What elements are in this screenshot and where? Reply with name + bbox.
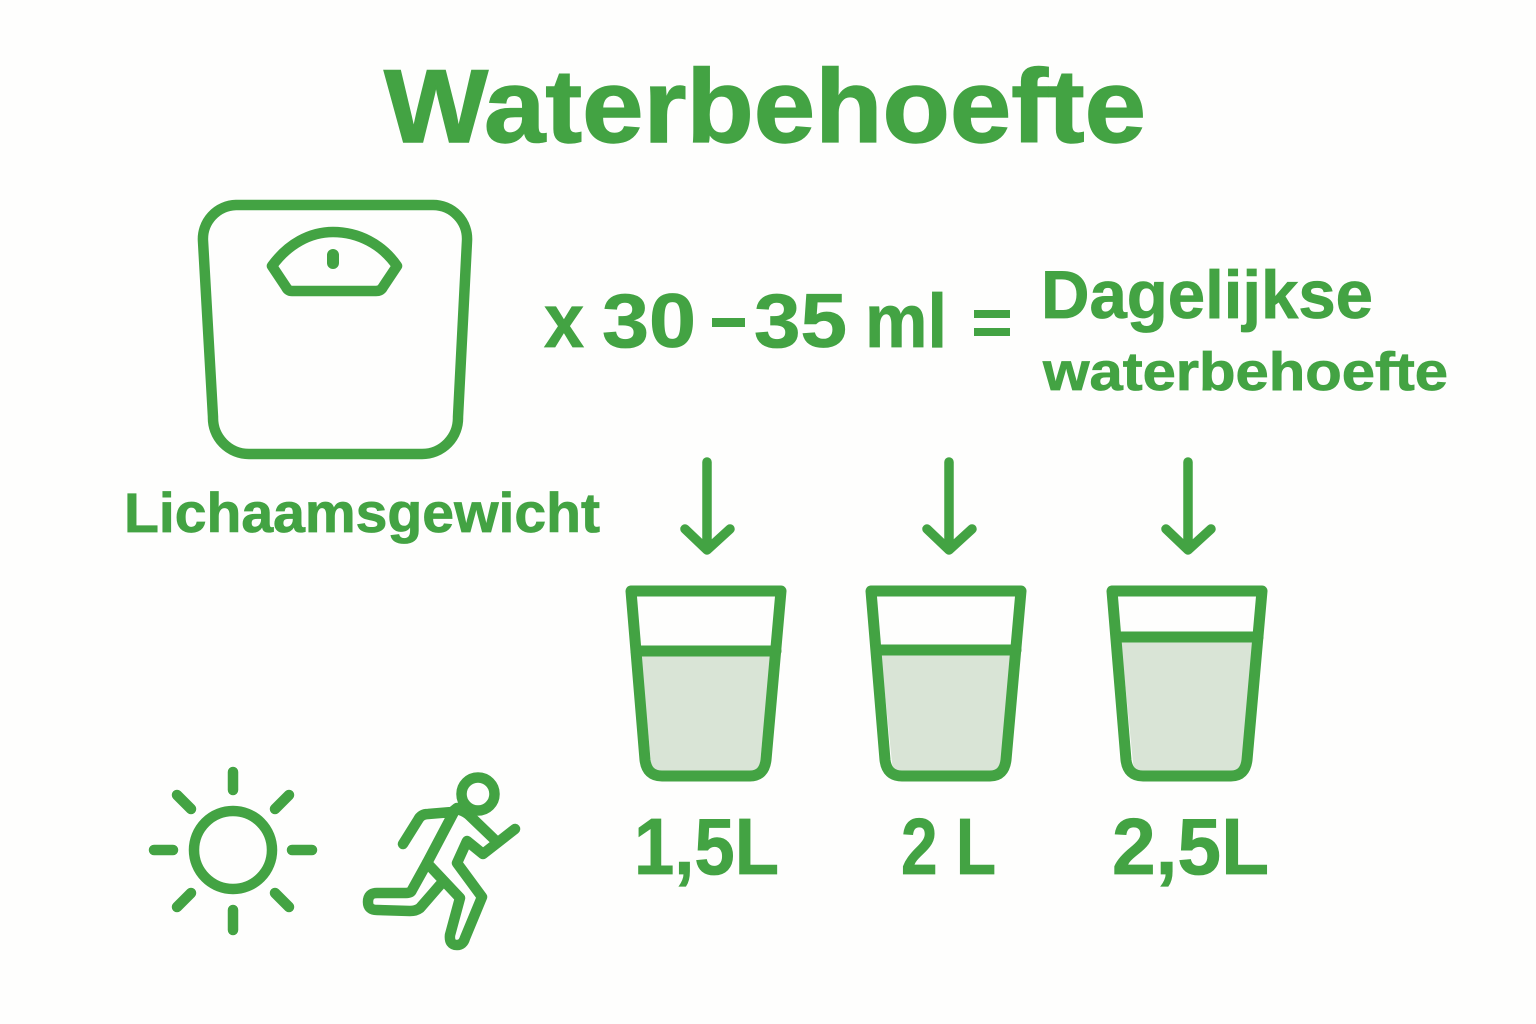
result: daily water need: Dagelijkse <box>1041 257 1373 333</box>
icon: sun <box>154 772 312 930</box>
label: 2 L: 2 L <box>901 802 996 891</box>
icon: running person <box>368 778 515 945</box>
formula: ml <box>865 279 947 364</box>
label: body weight: Lichaamsgewicht <box>124 481 600 544</box>
arrow: to glass 2 <box>927 462 972 550</box>
glass: 1,5 L <box>631 591 781 776</box>
formula <box>544 279 1010 364</box>
result: daily water need <box>1041 257 1448 402</box>
formula: x <box>544 279 584 364</box>
glass: 2 L <box>871 591 1021 776</box>
label: 1,5 L: 1,5L <box>634 802 779 891</box>
label: 2,5 L: 2,5L <box>1112 802 1269 891</box>
formula: 30 <box>602 279 696 364</box>
result: daily water need: waterbehoefte <box>1042 342 1448 402</box>
glass: 2,5 L <box>1112 591 1262 776</box>
icon: weighing scale <box>203 205 467 454</box>
title: Waterbehoefte <box>384 49 1146 165</box>
arrow: to glass 3 <box>1166 462 1211 550</box>
arrow: to glass 1 <box>685 462 730 550</box>
formula: 35 <box>754 279 847 364</box>
